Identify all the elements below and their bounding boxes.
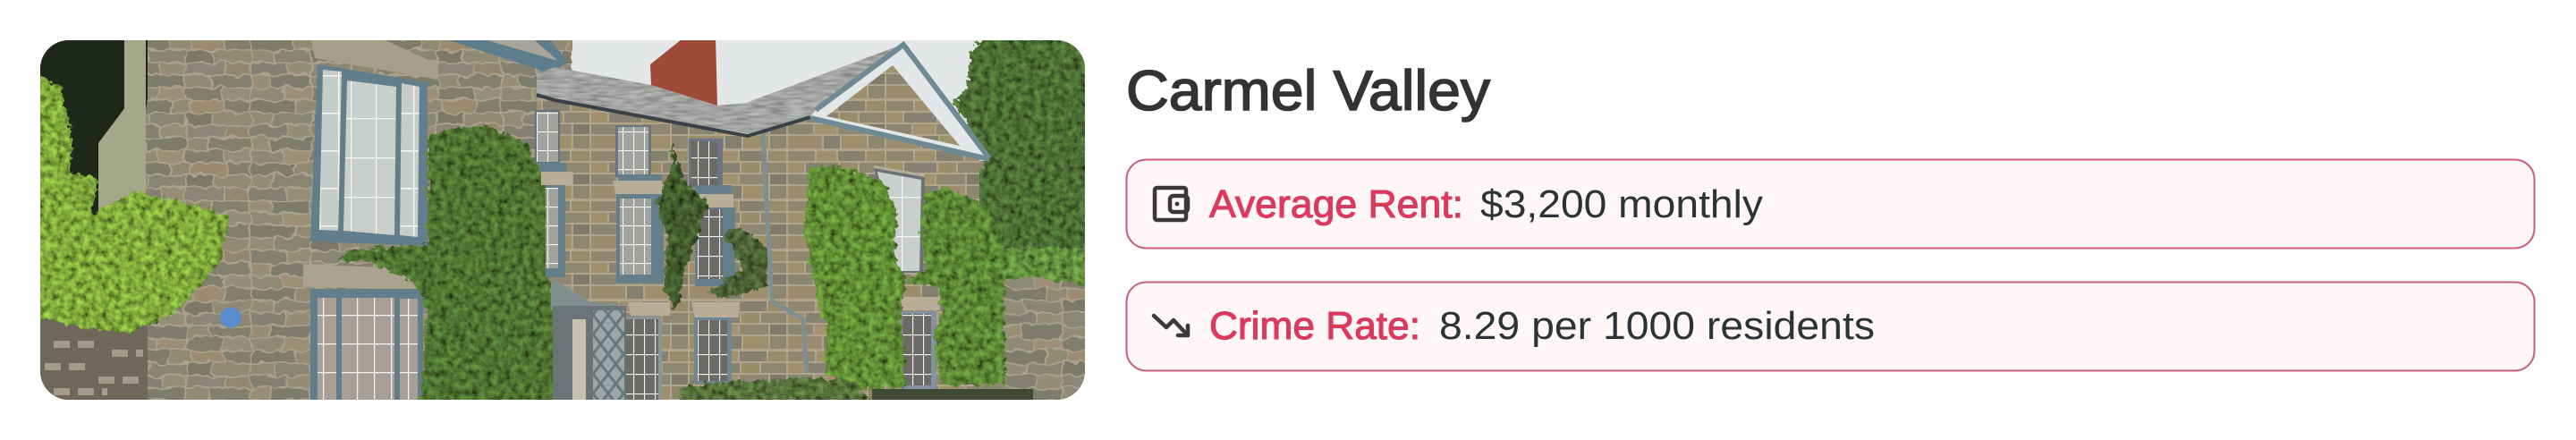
right-hand wall (1004, 277, 1085, 400)
second ivy column (905, 188, 1004, 385)
stone lintels (541, 165, 940, 317)
far-left centre windows (535, 110, 566, 277)
left window lintel (311, 40, 438, 80)
climbing rose (657, 143, 708, 310)
porch with lattice (551, 280, 631, 404)
pale side wall and drainpipe (98, 40, 146, 210)
left lower window (310, 289, 423, 405)
ground-floor windows (624, 317, 732, 404)
upper windows, centre block (615, 125, 732, 195)
rose tendrils right (708, 226, 770, 298)
middle and right wall (537, 72, 979, 407)
ivy climbing the gable wall (336, 125, 572, 407)
ivy column on the wing (803, 165, 905, 391)
gable front (826, 65, 960, 146)
photo: stone house with ivy (31, 27, 1109, 407)
drainpipe (763, 134, 807, 373)
left lower lintel (303, 264, 418, 291)
undergrowth behind wall (1000, 248, 1098, 288)
value: crime rate: 8.29 per 1000 residents (1439, 304, 1875, 348)
label: crime rate: Crime Rate: (1209, 304, 1420, 348)
gutter (537, 95, 810, 136)
lower-left wall stones (45, 344, 143, 392)
panel: average rent (1127, 159, 2535, 249)
main gable wall (134, 36, 572, 407)
blue plaque (220, 308, 242, 327)
bright green shrub (31, 69, 230, 334)
left upper window (310, 64, 428, 246)
dark foliage at left (40, 40, 148, 216)
panel: crime rate (1127, 283, 2535, 370)
gable trim (810, 45, 989, 159)
lower-left garden wall (40, 318, 148, 400)
chimney (650, 36, 717, 106)
icon: trending down arrow (1154, 316, 1188, 335)
icon: wallet (1155, 188, 1188, 220)
middle windows (616, 194, 735, 286)
slate roof (537, 45, 902, 134)
title: Carmel Valley (1126, 60, 1491, 123)
lower right window (900, 311, 936, 390)
photo base colour (36, 36, 1091, 407)
iron fence (872, 389, 1033, 400)
sky (555, 36, 1091, 161)
label: average rent: Average Rent: (1209, 182, 1463, 226)
lower hedge (679, 377, 871, 400)
tall window on right wing (874, 168, 925, 273)
value: average rent: $3,200 monthly (1480, 182, 1763, 226)
tree at right (952, 40, 1085, 292)
left gable roof strip (449, 40, 568, 72)
